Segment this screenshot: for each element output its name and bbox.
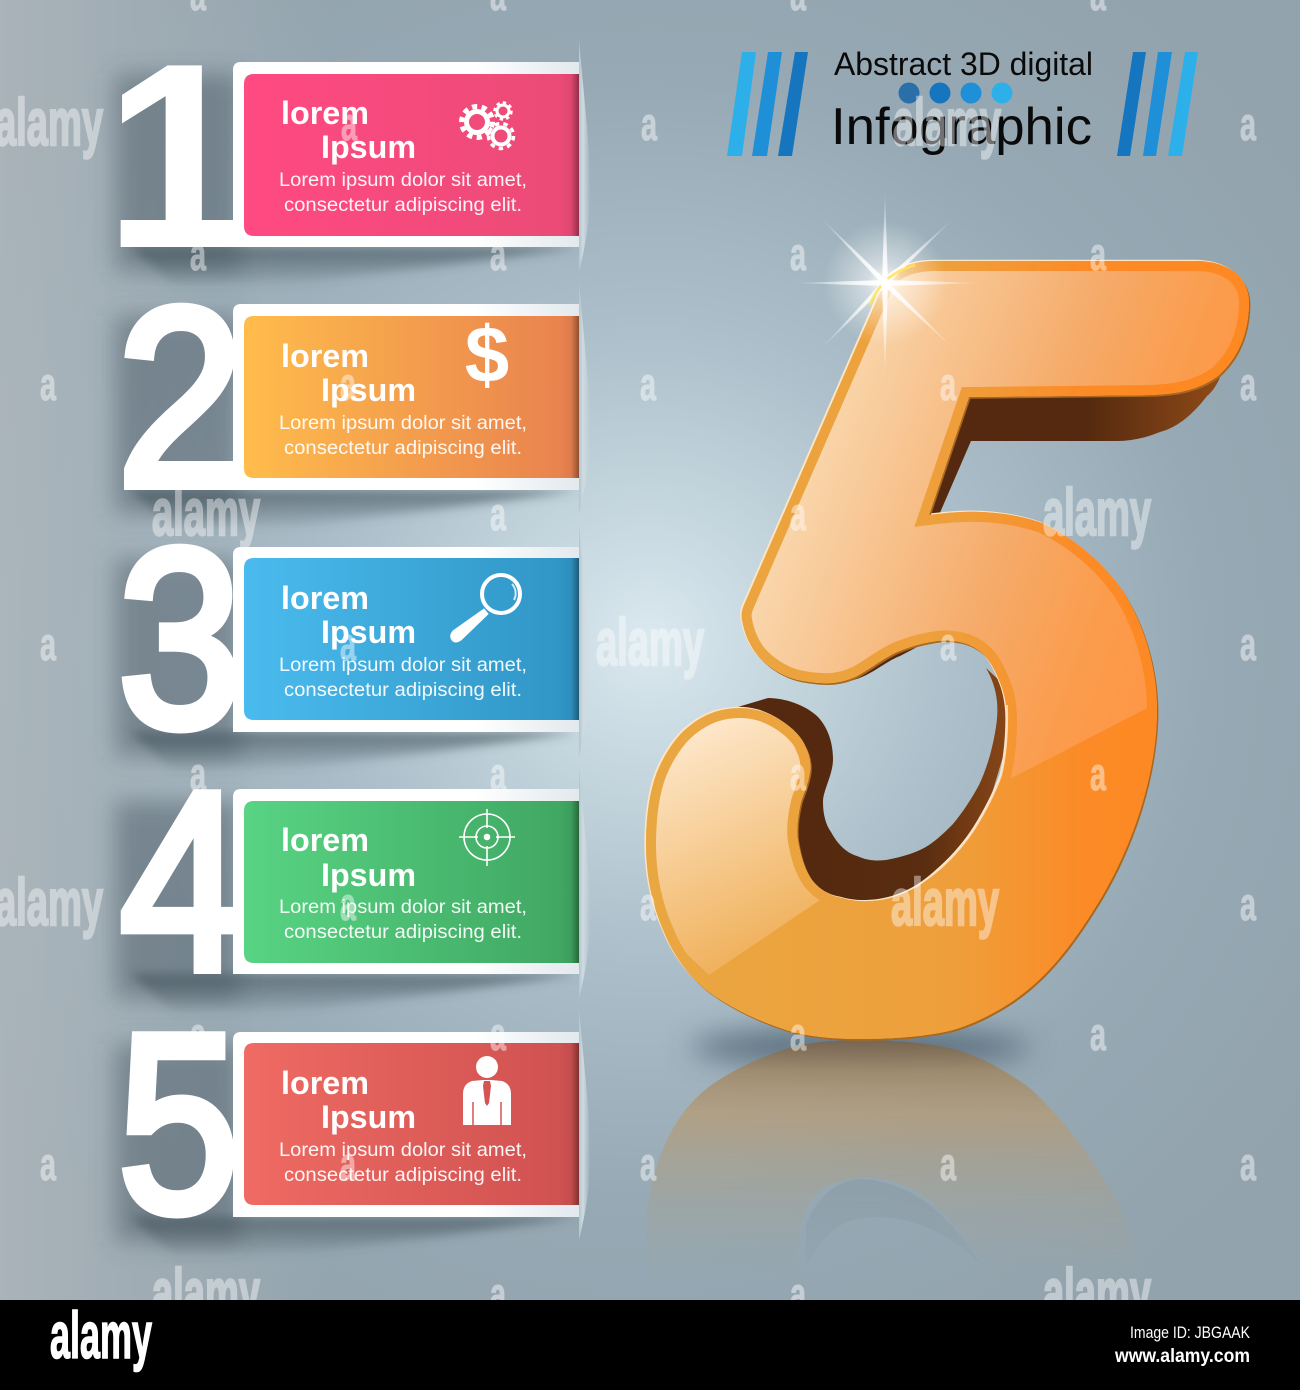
body line 2: consectetur adipiscing elit. <box>284 194 522 216</box>
watermark: small marks: a <box>341 98 357 150</box>
numeral: 3 <box>118 496 242 780</box>
slit 4 <box>579 767 590 999</box>
coloured card <box>244 801 579 963</box>
watermark: alamy words: alamy <box>0 85 103 159</box>
footer url: www.alamy.com <box>1114 1346 1250 1367</box>
watermark: small marks: a <box>190 1008 206 1060</box>
front face <box>646 261 1249 1039</box>
white frame <box>233 547 579 732</box>
heading line 2: Ipsum <box>321 857 416 893</box>
lower solid band <box>701 720 1157 1039</box>
heading: lorem <box>281 580 369 616</box>
watermark: alamy words: alamy <box>0 865 103 939</box>
watermark: small marks: a <box>790 748 806 800</box>
watermark: small marks: a <box>40 358 56 410</box>
watermark: alamy words: alamy <box>152 1255 260 1329</box>
body line 2: consectetur adipiscing elit. <box>284 921 522 943</box>
watermark: alamy words: alamy <box>893 85 1001 159</box>
card edge shade <box>559 558 579 720</box>
footer logo: alamy <box>50 1298 152 1372</box>
watermark: small marks: a <box>1240 1138 1256 1190</box>
body line 1: Lorem ipsum dolor sit amet, <box>279 896 527 918</box>
watermark: small marks: a <box>1090 228 1106 280</box>
watermark: alamy words: alamy <box>596 605 704 679</box>
slit 1 <box>579 40 590 272</box>
shadow <box>115 559 579 771</box>
watermark: small marks: a <box>340 1138 356 1190</box>
watermark: small marks: a <box>790 228 806 280</box>
shadow <box>115 801 579 1013</box>
icon: magnifier <box>451 575 520 642</box>
extrusion: sliver under upper lip <box>830 640 931 684</box>
watermark: alamy words: alamy <box>1043 1255 1151 1329</box>
watermark: small marks: a <box>190 228 206 280</box>
extrusion: top bar underside <box>925 372 1222 515</box>
reflection of number five <box>646 1040 1128 1232</box>
highlight sliver in the bowl <box>916 705 1007 887</box>
watermark: small marks: a <box>340 358 356 410</box>
item 4 <box>115 739 579 1023</box>
heading line 2: Ipsum <box>321 129 416 165</box>
watermark: small marks: a <box>40 618 56 670</box>
watermark: small marks: a <box>340 878 356 930</box>
edge: dark rim bottom right <box>647 263 1250 1041</box>
white frame <box>233 789 579 974</box>
coloured card <box>244 74 579 236</box>
extrusion: lower curve <box>731 668 1020 900</box>
shadow <box>115 74 579 286</box>
watermark: small marks: a <box>790 1268 806 1320</box>
icon: businessman <box>463 1056 511 1125</box>
heading line 2: Ipsum <box>321 372 416 408</box>
coloured card <box>244 316 579 478</box>
body line 1: Lorem ipsum dolor sit amet, <box>279 169 527 191</box>
card edge shade <box>559 801 579 963</box>
watermark: small marks: a <box>40 1138 56 1190</box>
numeral: 4 <box>120 739 245 1023</box>
numeral: 2 <box>117 255 244 539</box>
footer image id: Image ID: JBGAAK <box>1130 1323 1251 1342</box>
sparkle on top left corner <box>795 190 982 376</box>
body line 2: consectetur adipiscing elit. <box>284 437 522 459</box>
icon: dollar: $ <box>465 310 509 399</box>
card edge shade <box>559 74 579 236</box>
watermark: small marks: a <box>940 618 956 670</box>
heading: lorem <box>281 822 369 858</box>
header: stripes left <box>727 52 808 156</box>
gloss: lower left lobe <box>646 708 829 975</box>
heading: lorem <box>281 1065 369 1101</box>
watermark: alamy words <box>0 85 1151 1329</box>
heading: lorem <box>281 95 369 131</box>
body line 1: Lorem ipsum dolor sit amet, <box>279 1139 527 1161</box>
item 3 <box>115 496 579 780</box>
icon: gears <box>462 102 514 148</box>
footer bar <box>0 1298 1300 1390</box>
header: title: Infographic <box>831 98 1092 156</box>
header: dots <box>898 82 1012 104</box>
watermark: small marks: a <box>640 1138 656 1190</box>
slit 3 <box>579 525 590 757</box>
coloured card <box>244 558 579 720</box>
watermark: alamy words: alamy <box>152 475 260 549</box>
watermark: small marks: a <box>1240 358 1256 410</box>
gloss: upper highlight <box>742 261 1249 778</box>
watermark: small marks: a <box>790 488 806 540</box>
header: stripes right <box>1117 52 1198 156</box>
white frame <box>233 1032 579 1217</box>
watermark: alamy words: alamy <box>891 865 999 939</box>
watermark: small marks: a <box>1240 618 1256 670</box>
heading line 2: Ipsum <box>321 1099 416 1135</box>
shadow <box>115 316 579 529</box>
body line 2: consectetur adipiscing elit. <box>284 1164 522 1186</box>
card edge shade <box>559 1043 579 1205</box>
number five: 3D figure <box>630 240 1260 1045</box>
watermark: small marks: a <box>640 878 656 930</box>
watermark: small marks: a <box>190 748 206 800</box>
watermark: small marks: a <box>1090 1008 1106 1060</box>
watermark: small marks: a <box>1240 878 1256 930</box>
edge: pale highlight on top left <box>644 260 1247 1038</box>
coloured card <box>244 1043 579 1205</box>
slit 2 <box>579 282 590 514</box>
item 5 <box>115 981 579 1265</box>
watermark: small marks: a <box>1090 748 1106 800</box>
heading: lorem <box>281 338 369 374</box>
face border band <box>646 261 1249 1039</box>
white frame <box>233 62 579 247</box>
icon: target <box>459 809 515 866</box>
shadow <box>115 1044 579 1256</box>
body line 1: Lorem ipsum dolor sit amet, <box>279 412 527 434</box>
watermark: small marks: a <box>940 1138 956 1190</box>
watermark: small marks: a <box>490 488 506 540</box>
watermark: small marks: a <box>940 358 956 410</box>
item 2 <box>115 255 579 539</box>
card edge shade <box>559 316 579 478</box>
watermark: small marks: a <box>790 1008 806 1060</box>
watermark: small marks: a <box>641 98 657 150</box>
item 1 <box>104 8 579 303</box>
watermark: small marks: a <box>490 748 506 800</box>
slit 5 <box>579 1008 590 1240</box>
shadow: floor under number five <box>690 1027 1030 1067</box>
numeral: 5 <box>118 981 239 1265</box>
watermark: alamy words: alamy <box>1043 475 1151 549</box>
watermark: small marks: a <box>490 1008 506 1060</box>
header: subtitle: Abstract 3D digital <box>834 46 1093 82</box>
watermark: small marks: a <box>640 358 656 410</box>
numeral: 1 <box>104 8 251 303</box>
heading line 2: Ipsum <box>321 614 416 650</box>
white frame <box>233 304 579 490</box>
watermark: small marks: a <box>1240 98 1256 150</box>
body line 1: Lorem ipsum dolor sit amet, <box>279 654 527 676</box>
watermark: small marks: a <box>490 228 506 280</box>
watermark: small marks: a <box>340 618 356 670</box>
body line 2: consectetur adipiscing elit. <box>284 679 522 701</box>
watermark: small marks: a <box>490 1268 506 1320</box>
